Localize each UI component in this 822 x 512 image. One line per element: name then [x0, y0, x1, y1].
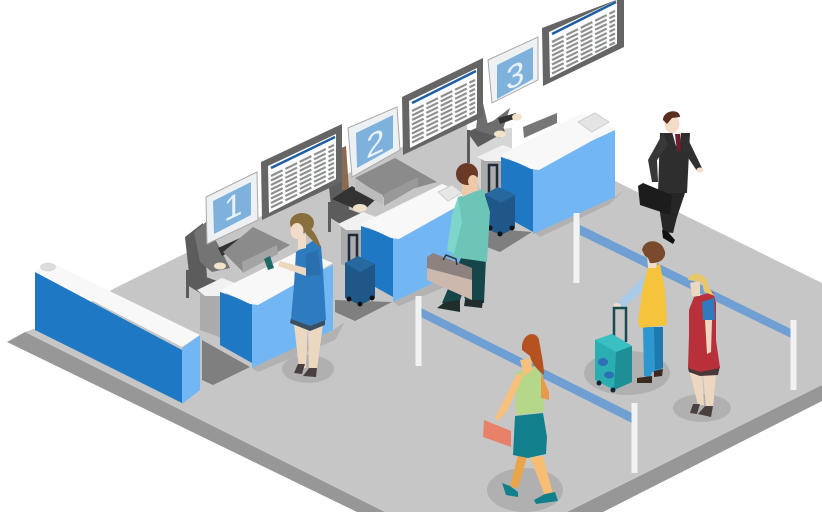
person with yellow vest [584, 241, 670, 395]
man in turquoise jacket [427, 163, 490, 312]
numeral 2: 2 [366, 122, 384, 167]
agent desk 3 [467, 90, 557, 163]
chair 2 [327, 155, 370, 232]
agent desk 1 [185, 222, 290, 298]
rope line front [416, 296, 638, 473]
agent 2 [332, 146, 375, 212]
agent 1 [194, 222, 250, 272]
desk 2 [355, 158, 437, 197]
chair 1 [185, 223, 228, 298]
keyboard panel 1 [242, 245, 278, 273]
keyboard panel 2 [384, 177, 418, 206]
counter 2 [338, 184, 486, 306]
keyboard panel 3 [523, 113, 557, 138]
barrier tray [40, 262, 56, 272]
navy suitcase 2 [485, 165, 515, 236]
sign 1 [206, 172, 258, 244]
numeral 3: 3 [506, 54, 524, 99]
front barrier [35, 262, 200, 404]
businessman [638, 111, 704, 244]
sign 2 [348, 107, 400, 177]
floor side edge [7, 332, 822, 512]
departure board 2 [402, 58, 483, 155]
salmon handbag [483, 420, 511, 447]
agent 3 [476, 90, 522, 138]
paper stack 3 [578, 113, 609, 132]
agent desk 2 [327, 146, 437, 232]
counter 3 [477, 113, 625, 237]
walking woman [483, 334, 563, 512]
teal suitcase [595, 308, 632, 392]
floor mats [202, 228, 532, 385]
woman with red dress [673, 274, 731, 422]
phone [264, 256, 274, 270]
briefcase [427, 253, 472, 300]
chair 3 [467, 118, 505, 163]
desk 1 [223, 227, 290, 272]
navy suitcase 1 [345, 235, 375, 306]
sign 3 [488, 37, 538, 103]
woman in blue dress [264, 213, 334, 383]
counter 1 [197, 250, 345, 372]
numeral 1: 1 [224, 185, 242, 230]
desk base behind counter 3 [468, 128, 512, 192]
paper stack 2 [438, 185, 462, 201]
departure board 1 [261, 124, 342, 220]
black briefcase [638, 183, 672, 215]
rope line rear [574, 213, 796, 390]
departure board 3 [542, 0, 624, 86]
floor surface [25, 116, 822, 512]
